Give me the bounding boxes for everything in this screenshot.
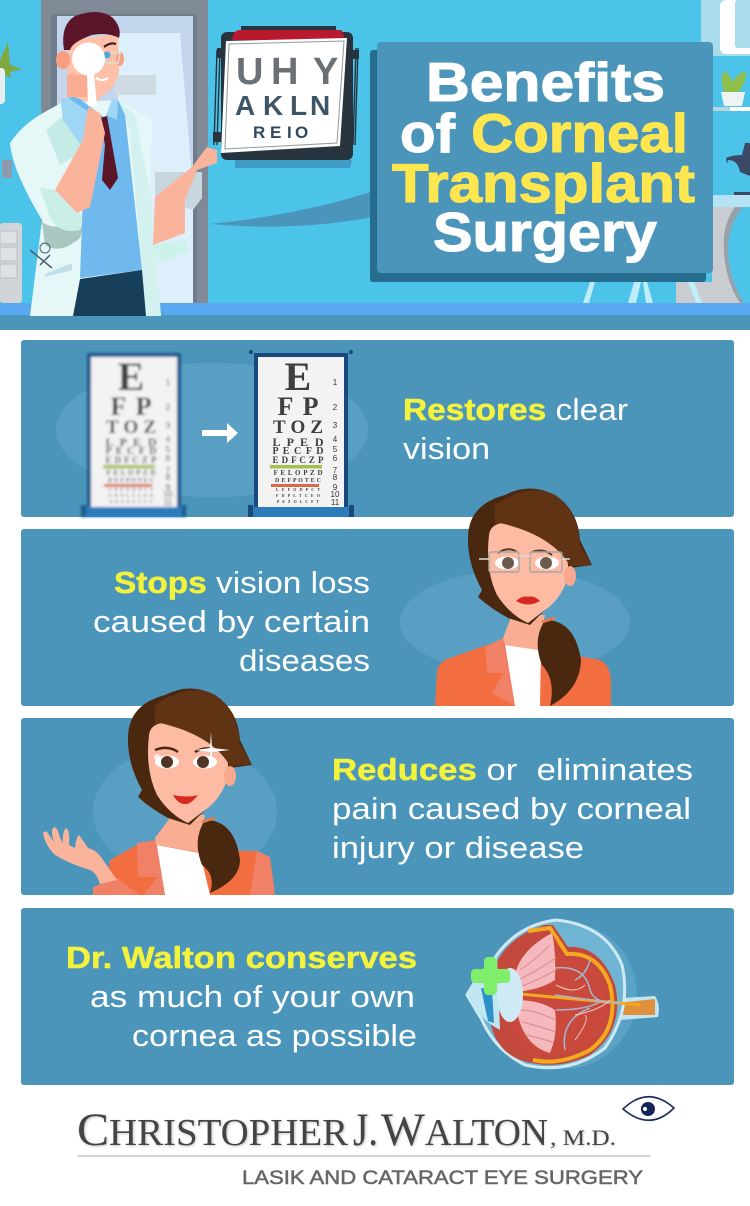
iris: [481, 988, 494, 1023]
text: dr walton conserves: as much of your own: [90, 979, 415, 1014]
sharp eye chart: 3: [333, 421, 338, 430]
title text: [392, 51, 695, 263]
door: [41, 0, 208, 303]
plus: [471, 957, 510, 995]
sharp eye chart: F E L O P Z D: [274, 469, 322, 477]
retinal vessels: [555, 960, 620, 1050]
hair: [63, 12, 120, 50]
sharp eye chart: F P: [278, 392, 319, 421]
logo name shadow: [78, 1105, 616, 1157]
logo name shadow: WALTON: [382, 1105, 548, 1157]
logo: [77, 1097, 674, 1189]
text: stops vision loss: caused by certain: [93, 604, 370, 639]
blurred eye chart: 7: [166, 466, 171, 475]
neck and face: [67, 34, 119, 104]
speech bubble tail: [210, 190, 377, 227]
blurred eye chart: 9: [166, 483, 171, 492]
tie: [100, 116, 118, 190]
sign letters: REIO: [253, 123, 308, 142]
occluder: [72, 43, 105, 106]
glasses and features: [69, 43, 120, 80]
text: stops vision loss: Stops vision loss: [114, 565, 370, 600]
title text: Transplant: [392, 152, 695, 214]
panel: stops vision loss: [21, 488, 734, 706]
hand: [43, 827, 117, 884]
sharp eye chart: 6: [333, 454, 338, 463]
text: restores clear vision: Restores clear: [403, 392, 628, 427]
blurred eye chart: P E Z O L C F T: [110, 499, 152, 504]
text: reduces pain: injury or disease: [332, 830, 584, 865]
header scene: [0, 0, 750, 330]
blurred eye chart: 1: [166, 378, 171, 387]
arrow: [202, 423, 238, 443]
sharp eye chart: D E F P O T E C: [275, 478, 321, 484]
logo name: J.: [353, 1104, 378, 1156]
right arm: [153, 147, 217, 245]
logo name: , M.D.: [550, 1125, 616, 1150]
lens: [497, 968, 523, 1022]
trousers: [73, 270, 146, 316]
sharp eye chart: 1: [333, 378, 338, 387]
text: restores clear vision: [403, 392, 628, 466]
pocket tools: [30, 243, 72, 277]
sharp eye chart: E: [285, 354, 311, 399]
sharp eye chart: P E Z O L C F T: [277, 499, 319, 504]
blurred eye chart: [81, 353, 186, 517]
blurred eye chart: F P: [110, 392, 152, 421]
sharp eye chart: [248, 350, 354, 517]
eye sign: [213, 26, 359, 168]
forearm: [55, 107, 105, 213]
right wall items: [583, 0, 750, 303]
blurred eye chart: 11: [164, 498, 173, 507]
text: reduces pain: Reduces or eliminates: [332, 752, 693, 787]
blurred eye chart: 3: [166, 421, 171, 430]
text: dr walton conserves: Dr. Walton conserves: [66, 940, 417, 975]
sharp eye chart: P E C F D: [272, 446, 324, 457]
logo name shadow: J.: [354, 1105, 379, 1157]
sharp eye chart: 11: [331, 498, 340, 507]
blurred eye chart: 5: [166, 445, 171, 454]
blurred eye chart: T O Z: [106, 417, 156, 438]
sharp eye chart: L E F O D P C T: [276, 487, 320, 492]
text: dr walton conserves: cornea as possible: [132, 1018, 417, 1053]
blurred eye chart: L P E D: [106, 435, 157, 449]
collar: [61, 97, 93, 147]
coat: [10, 100, 161, 316]
panel: restores clear vision: [21, 340, 734, 517]
sign letters: UHY: [236, 51, 338, 93]
sparkle: [196, 732, 230, 757]
eye anatomy: [467, 920, 659, 1069]
blurred eye chart: 4: [166, 435, 171, 444]
text: reduces pain: pain caused by corneal: [332, 791, 691, 826]
title text: of Corneal: [400, 102, 688, 164]
sharp eye chart: 7: [333, 466, 338, 475]
sign letters: AKLN: [235, 90, 330, 121]
shirt: [62, 96, 142, 278]
blurred eye chart: E D F C Z P: [106, 455, 157, 465]
blurred eye chart: 2: [166, 403, 171, 412]
sharp eye chart: 2: [333, 403, 338, 412]
blurred eye chart: P E C F D: [106, 446, 156, 457]
left wall items: [0, 42, 22, 303]
logo name: WALTON: [381, 1104, 548, 1156]
logo name shadow: , M.D.: [551, 1126, 616, 1151]
text: stops vision loss: diseases: [239, 643, 370, 678]
sharp eye chart: E D F C Z P: [272, 455, 324, 465]
doctor: [10, 12, 217, 316]
text: stops vision loss: [93, 565, 370, 678]
logo tagline: LASIK AND CATARACT EYE SURGERY: [242, 1168, 643, 1189]
sharp eye chart: 9: [333, 483, 338, 492]
sharp eye chart: 5: [333, 445, 338, 454]
title panel: [370, 42, 713, 282]
blurred eye chart: D E F P O T E C: [108, 478, 154, 484]
logo name: [77, 1104, 616, 1156]
blurred eye chart: E: [118, 354, 144, 399]
sharp eye chart: T O Z: [273, 417, 323, 438]
sign letters: [235, 51, 338, 142]
sharp eye chart: 10: [331, 490, 340, 499]
logo name shadow: CHRISTOPHER: [78, 1105, 350, 1157]
sharp eye chart: F D P L T C E O: [276, 493, 320, 498]
text: restores clear vision: vision: [403, 431, 490, 466]
panel: dr walton conserves: [21, 908, 734, 1085]
text: dr walton conserves: [66, 940, 417, 1053]
blurred eye chart: F E L O P Z D: [106, 469, 156, 477]
blurred eye chart: 10: [164, 490, 173, 499]
woman with glasses: [435, 488, 611, 706]
blurred eye chart: F D P L T C E O: [109, 493, 153, 498]
logo eye icon: [623, 1097, 674, 1120]
smiling woman: [43, 688, 275, 895]
title text: Benefits: [426, 51, 665, 113]
blurred eye chart: L E F O D P C T: [109, 487, 153, 492]
optic nerve line: [520, 994, 640, 1005]
floor band: [0, 315, 750, 330]
cornea: [467, 957, 500, 1030]
sharp eye chart: 8: [333, 473, 338, 482]
text: reduces pain: [332, 752, 693, 865]
title text: Surgery: [433, 201, 657, 263]
sharp eye chart: L P E D: [272, 435, 324, 449]
panel: reduces pain: [21, 688, 734, 895]
floor strip: [0, 303, 750, 316]
blurred eye chart: 8: [166, 473, 171, 482]
sharp eye chart: 4: [333, 435, 338, 444]
blurred eye chart: 6: [166, 454, 171, 463]
logo name: CHRISTOPHER: [77, 1104, 349, 1156]
ears: [56, 51, 70, 69]
